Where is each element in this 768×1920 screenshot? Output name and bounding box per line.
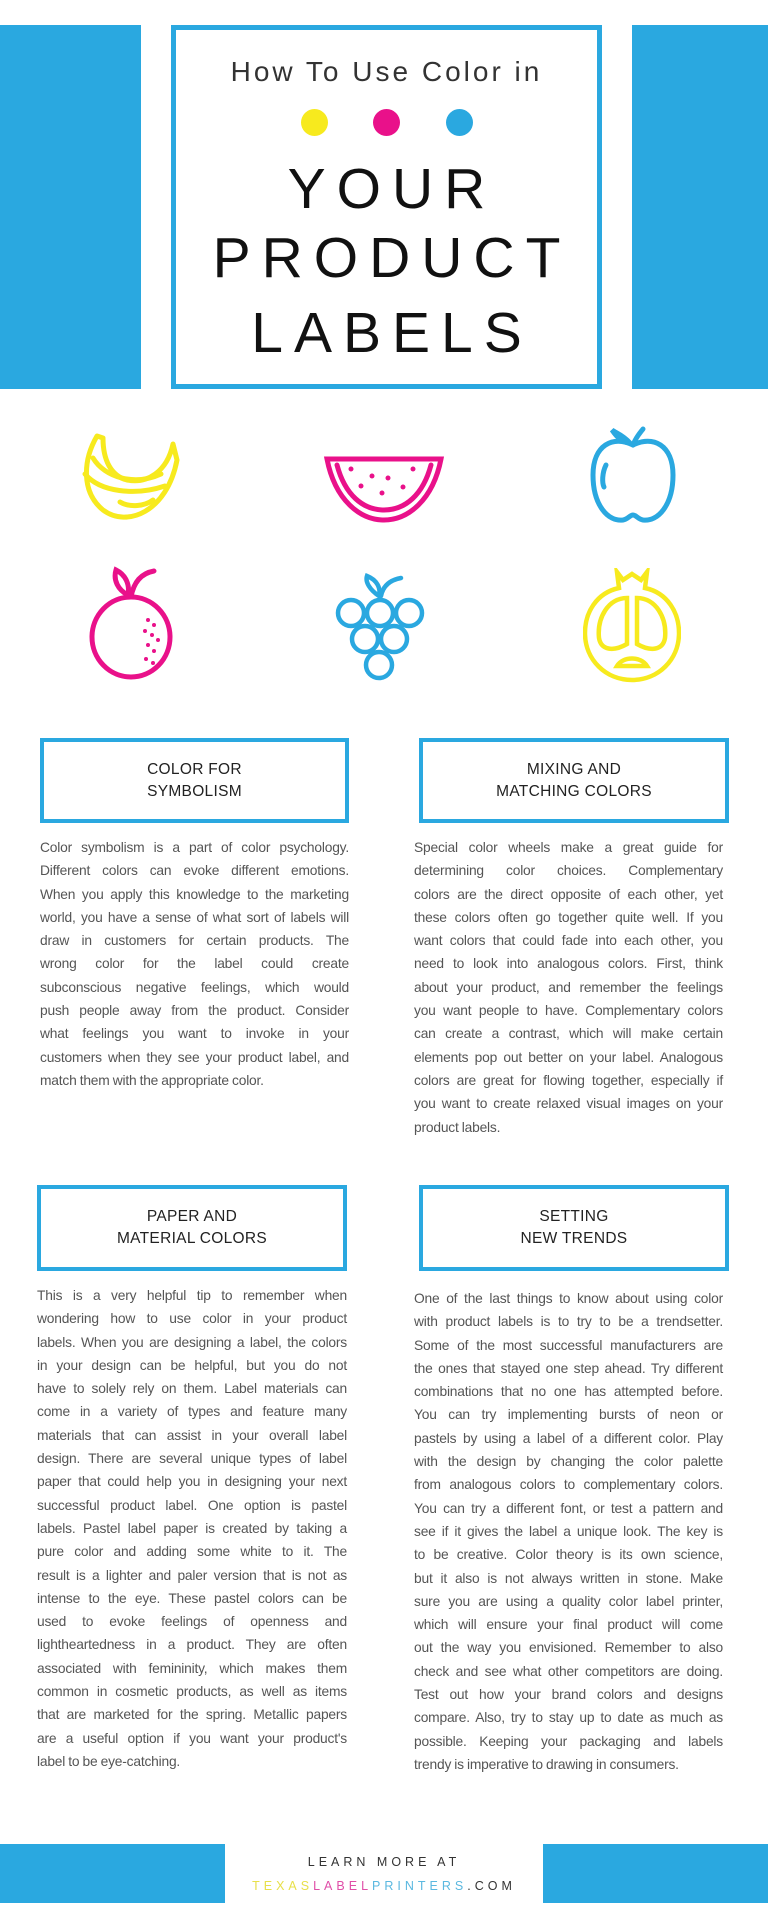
heading box: setting new trends: SETTING: [539, 1208, 609, 1225]
text: color for symbolism: customers when they see your product label, and: [40, 1050, 349, 1065]
text: setting new trends: Some of the most successful manufacturers are: [414, 1338, 723, 1353]
text: mixing and matching: determining color choices. Complementary: [414, 863, 723, 878]
text: paper and material: are a useful option if you want your product's: [37, 1731, 347, 1746]
text: setting new trends: combinations that no one has attempted before.: [414, 1384, 723, 1399]
text: mixing and matching: can create a contrast, which will make certain: [414, 1026, 723, 1041]
text: setting new trends: trendy is imperative to drawing in consumers.: [414, 1757, 679, 1772]
text: mixing and matching: [414, 840, 724, 1135]
icon: watermelon: [324, 456, 444, 522]
text: setting new trends: You can try a different font, or test a pattern and: [414, 1501, 723, 1516]
text: color for symbolism: draw in customers for certain products. The: [40, 933, 349, 948]
icon: orange: [90, 566, 172, 680]
text: paper and material: labels. Pastel label paper is created by taking a: [37, 1521, 347, 1536]
text: paper and material: [37, 1288, 348, 1769]
text: setting new trends: but it also is not always written in stone. Make: [414, 1571, 723, 1586]
text: mixing and matching: want colors that could fade into each other, you: [414, 933, 723, 948]
text: color for symbolism: When you apply this knowledge to the marketing: [40, 887, 349, 902]
title: your: YOUR: [288, 157, 496, 221]
text: color for symbolism: Different colors can evoke different emotions.: [40, 863, 349, 878]
text: paper and material: in your design can be helpful, but you do not: [37, 1358, 347, 1373]
text: paper and material: design. There are several unique types of label: [37, 1451, 347, 1466]
text: mixing and matching: you want people to have. Complementary colors: [414, 1003, 723, 1018]
text: paper and material: used to evoke feelings of openness and: [37, 1614, 347, 1629]
text: setting new trends: which will ensure your final product will come: [414, 1617, 723, 1632]
heading box: mixing and matching colors: [419, 738, 729, 823]
icon: banana: [82, 434, 180, 520]
heading box: color for symbolism: COLOR FOR: [147, 760, 242, 778]
text: mixing and matching: Special color wheels make a great guide for: [414, 840, 723, 855]
text: mixing and matching: about your product, and remember the feelings: [414, 980, 723, 995]
text: setting new trends: with the design by changing the color palette: [414, 1454, 723, 1469]
icon: grapes: [336, 573, 424, 680]
text: setting new trends: sure you are using a quality color label printer,: [414, 1594, 723, 1609]
text: mixing and matching: product labels.: [414, 1120, 500, 1135]
heading box: mixing and matching colors: MIXING AND: [527, 760, 621, 778]
footer right bar: [543, 1844, 768, 1903]
title: how to use color in: How To Use Color in: [231, 56, 542, 87]
text: setting new trends: with product labels is to try to be a trendsetter.: [414, 1314, 723, 1329]
text: color for symbolism: what feelings you want to invoke in your: [40, 1026, 349, 1041]
title frame: [171, 25, 602, 389]
text: setting new trends: check and see what other competitors are doing.: [414, 1664, 723, 1679]
text: mixing and matching: colors are great for flowing together, especially if: [414, 1073, 723, 1088]
text: paper and material: intense to the eye. These pastel colors can be: [37, 1591, 347, 1606]
footer left bar: [0, 1844, 225, 1903]
text: setting new trends: possible. Keeping your packaging and labels: [414, 1734, 723, 1749]
text: paper and material: labels. When you are designing a label, the colors: [37, 1335, 347, 1350]
text: mixing and matching: need to look into analogous colors. First, think: [414, 956, 723, 971]
text: setting new trends: the ones that stayed one step ahead. Try different: [414, 1361, 723, 1376]
text: setting new trends: to be creative. Color theory is its own science,: [414, 1547, 723, 1562]
dots: [301, 109, 473, 136]
text: paper and material: This is a very helpful tip to remember when: [37, 1288, 347, 1303]
text: setting new trends: You can try implementing bursts of neon or: [414, 1407, 723, 1422]
text: paper and material: associated with femininity, which makes them: [37, 1661, 347, 1676]
text: mixing and matching: elements pop out better on your label. Analogous: [414, 1050, 723, 1065]
text: paper and material: label to be eye-catching.: [37, 1754, 180, 1769]
text: paper and material: that are marketed for the spring. Metallic papers: [37, 1707, 347, 1722]
heading box: setting new trends: [419, 1185, 729, 1271]
text: setting new trends: Test out how your brand colors and designs: [414, 1687, 723, 1702]
heading box: setting new trends: NEW TRENDS: [521, 1230, 627, 1247]
text: paper and material: pure color and adding some white to it. The: [37, 1544, 347, 1559]
title: labels: LABELS: [251, 301, 533, 365]
text: mixing and matching: colors are the direct opposite of each other, yet: [414, 887, 723, 902]
text: setting new trends: compare. Also, try to stay up to date as much as: [414, 1710, 723, 1725]
footer text: [252, 1855, 516, 1893]
text: setting new trends: out the way you envisioned. Remember to also: [414, 1640, 723, 1655]
heading box: mixing and matching colors: MATCHING COLORS: [496, 782, 652, 800]
heading box: paper and material colors: PAPER AND: [147, 1208, 237, 1225]
footer text: LEARN MORE AT: [308, 1855, 460, 1869]
text: paper and material: result is a lighter and paler version that is not as: [37, 1568, 347, 1583]
text: color for symbolism: [40, 840, 349, 1088]
text: setting new trends: see if it gives the label a unique look. The key is: [414, 1524, 723, 1539]
text: setting new trends: pastels by using a label of a different color. Play: [414, 1431, 723, 1446]
text: paper and material: wondering how to use color in your product: [37, 1311, 347, 1326]
text: color for symbolism: match them with the appropriate color.: [40, 1073, 264, 1088]
text: color for symbolism: push people away from the product. Consider: [40, 1003, 349, 1018]
text: color for symbolism: subconscious negative feelings, which would: [40, 980, 349, 995]
text: paper and material: have to solely rely on them. Label materials can: [37, 1381, 347, 1396]
text: paper and material: successful product label. One option is pastel: [37, 1498, 347, 1513]
text: setting new trends: [414, 1291, 724, 1772]
text: color for symbolism: Color symbolism is a part of color psychology.: [40, 840, 349, 855]
heading box: color for symbolism: SYMBOLISM: [147, 782, 242, 800]
text: mixing and matching: these colors often go together quite well. If you: [414, 910, 723, 925]
right header bar: [632, 25, 768, 389]
text: paper and material: materials that can assist in your overall label: [37, 1428, 347, 1443]
left header bar: [0, 25, 141, 389]
heading box: paper and material colors: [37, 1185, 347, 1271]
text: paper and material: common in cosmetic products, as well as items: [37, 1684, 347, 1699]
text: paper and material: paper that could help you in designing your next: [37, 1474, 347, 1489]
title: product: PRODUCT: [213, 226, 571, 290]
footer text: TEXASLABELPRINTERS.COM: [252, 1879, 516, 1893]
text: setting new trends: from analogous colors to complementary colors.: [414, 1477, 723, 1492]
text: color for symbolism: world, you have a sense of what sort of labels will: [40, 910, 349, 925]
icon: pomegranate: [583, 568, 681, 682]
icon: apple: [590, 426, 676, 523]
text: color for symbolism: wrong color for the label could create: [40, 956, 349, 971]
heading box: color for symbolism: [40, 738, 349, 823]
text: paper and material: lightheartedness in a product. They are often: [37, 1637, 347, 1652]
heading box: paper and material colors: MATERIAL COLORS: [117, 1230, 267, 1247]
text: paper and material: come in a variety of types and feature many: [37, 1404, 347, 1419]
text: mixing and matching: you want to create relaxed visual images on your: [414, 1096, 723, 1111]
text: setting new trends: One of the last things to know about using color: [414, 1291, 723, 1306]
